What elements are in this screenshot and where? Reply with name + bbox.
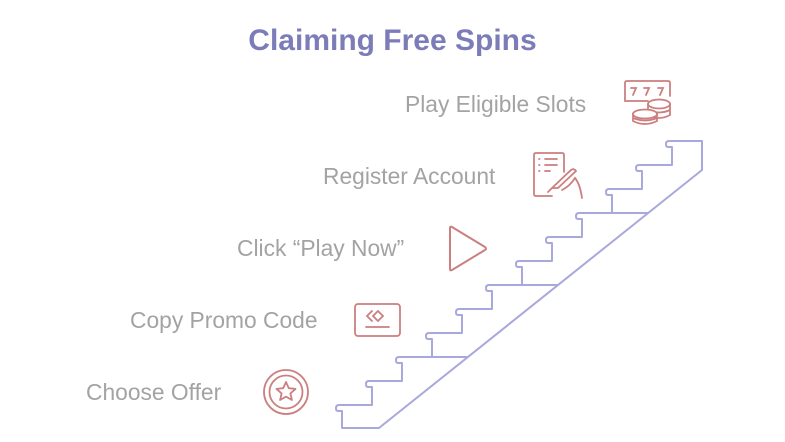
icon: play bbox=[450, 227, 486, 270]
label: register account: Register Account bbox=[323, 163, 495, 189]
icon: register form bbox=[534, 153, 582, 198]
icon: promo code bbox=[355, 304, 400, 336]
title: Claiming Free Spins bbox=[248, 24, 537, 57]
icon: slots and coins bbox=[625, 81, 670, 124]
label: choose offer: Choose Offer bbox=[86, 379, 221, 405]
icon: star badge bbox=[264, 370, 308, 414]
label: click play now: Click “Play Now” bbox=[237, 235, 404, 261]
label: play eligible slots: Play Eligible Slots bbox=[405, 91, 586, 117]
label: copy promo code: Copy Promo Code bbox=[130, 307, 318, 333]
staircase bbox=[336, 141, 702, 428]
